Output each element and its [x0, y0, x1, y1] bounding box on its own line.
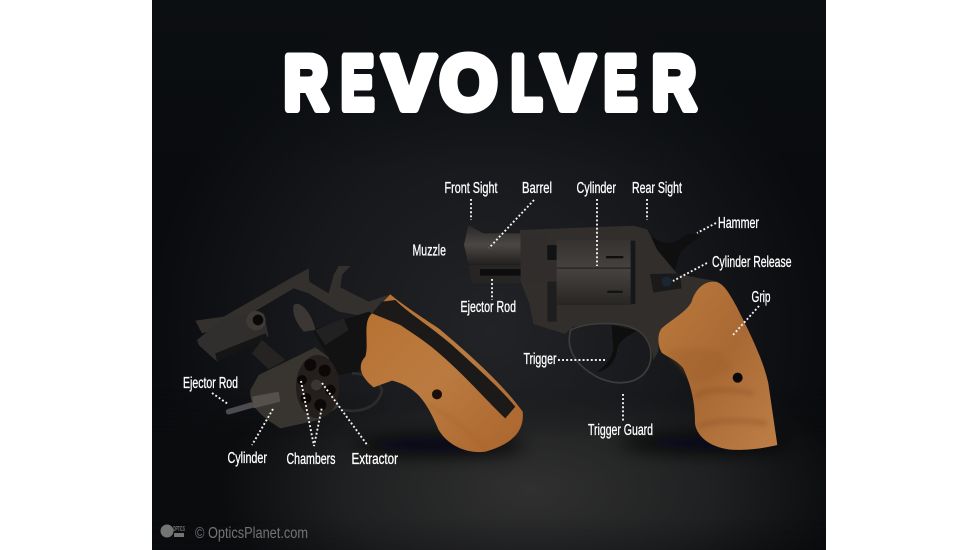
grip: [658, 282, 777, 450]
labels: right revolver: Trigger: [524, 351, 557, 368]
title: V: [542, 41, 594, 126]
hammer: [652, 234, 700, 270]
labels: right revolver: Rear Sight: [632, 180, 682, 197]
watermark: [160, 524, 308, 542]
black stripe: [372, 300, 515, 418]
trigger guard: [569, 324, 651, 383]
title: R: [652, 41, 696, 126]
topstrap and hammer: [195, 266, 409, 333]
labels: right revolver: Hammer: [718, 215, 759, 232]
labels: right revolver: Ejector Rod: [460, 299, 516, 316]
labels: left revolver: Ejector Rod: [183, 375, 238, 392]
cylinder: [557, 240, 635, 305]
grip: [361, 294, 523, 452]
cylinder release: [315, 318, 349, 345]
labels: left revolver: Cylinder: [228, 450, 267, 467]
title: V: [383, 41, 435, 126]
labels: right revolver: Trigger Guard: [588, 422, 653, 439]
labels: right revolver: Cylinder Release: [712, 254, 792, 271]
labels: left revolver: Chambers: [286, 451, 336, 468]
labels: right revolver: Cylinder: [576, 180, 616, 197]
frame: [312, 312, 379, 375]
labels: right revolver: Barrel: [522, 180, 552, 197]
cylinder release: [650, 273, 682, 293]
ejector rod: [229, 405, 252, 412]
barrel: [197, 311, 285, 369]
title: O: [440, 41, 497, 126]
left revolver: [195, 266, 523, 452]
ejector housing: [468, 265, 521, 283]
frame: [520, 226, 718, 360]
trigger guard: [342, 373, 382, 411]
dotted leader lines: [212, 199, 759, 446]
title: E: [341, 41, 374, 126]
background panel: [152, 0, 826, 550]
labels: right revolver: Muzzle: [412, 242, 446, 260]
title: R: [284, 41, 328, 126]
title: L: [511, 41, 542, 126]
watermark: OPTICS: [173, 526, 185, 533]
watermark: © OpticsPlanet.com: [195, 525, 308, 542]
barrel: [464, 225, 521, 264]
labels: right revolver: Front Sight: [444, 180, 498, 197]
right revolver: [464, 225, 777, 450]
title: E: [604, 41, 637, 126]
labels: right revolver: Grip: [752, 289, 771, 306]
labels: left revolver: Extractor: [352, 451, 398, 468]
cylinder: [250, 347, 339, 428]
labels: right revolver: [412, 180, 792, 439]
labels: left revolver: [183, 375, 398, 468]
trigger: [597, 325, 637, 372]
